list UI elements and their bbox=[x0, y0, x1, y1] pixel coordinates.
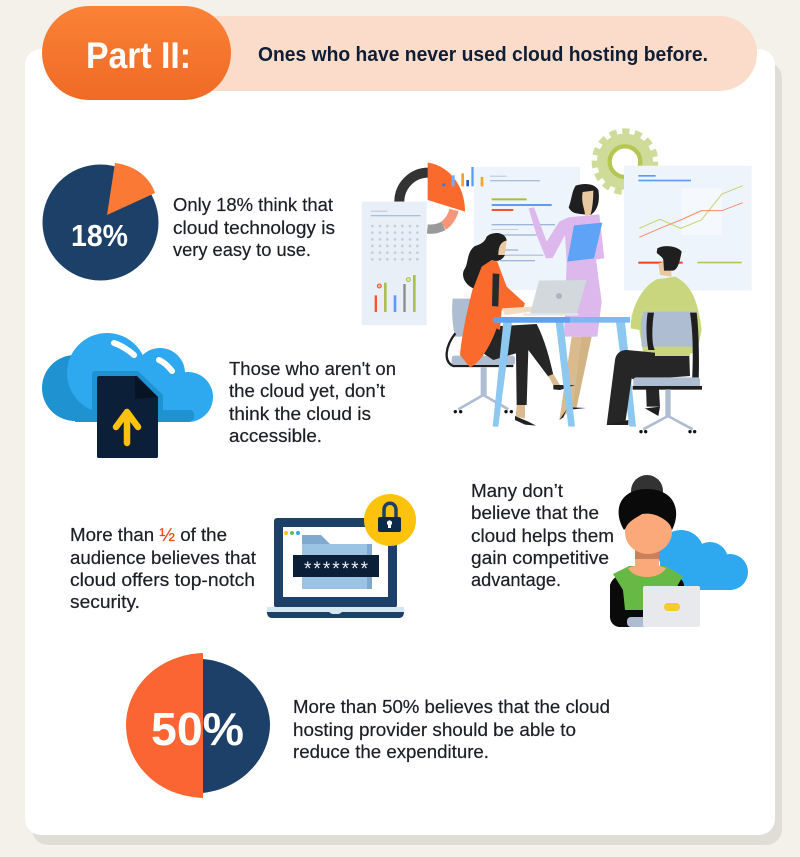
text: expenditure: More than 50% believes that the cloud bbox=[293, 697, 610, 717]
50% pie chart bbox=[126, 653, 270, 798]
seated man bbox=[607, 246, 702, 425]
right dashboard panel with line chart bbox=[624, 166, 752, 291]
mini bar chart bbox=[442, 167, 483, 186]
text: competitive advantage: advantage. bbox=[471, 570, 561, 590]
text: easy to use: Only 18% think that bbox=[173, 195, 333, 215]
icon: woman with laptop and cloud bbox=[610, 475, 748, 627]
laptop bbox=[523, 280, 587, 316]
text: security: security. bbox=[70, 592, 140, 612]
icon: cloud with file upload bbox=[42, 333, 213, 458]
left dashboard panel bbox=[362, 202, 427, 325]
text: competitive advantage: gain competitive bbox=[471, 548, 609, 568]
donut chart bbox=[399, 163, 465, 229]
part badge bbox=[42, 6, 231, 100]
text: easy to use: very easy to use. bbox=[173, 240, 311, 260]
text: security bbox=[70, 525, 256, 612]
text: accessible: the cloud yet, don’t bbox=[229, 381, 385, 401]
seated man's chair bbox=[633, 312, 702, 433]
standing woman bbox=[529, 184, 604, 420]
part badge: Part II: bbox=[86, 35, 191, 76]
text: easy to use: cloud technology is bbox=[173, 218, 335, 238]
text: competitive advantage: believe that the bbox=[471, 503, 599, 523]
icon: laptop with password and lock bbox=[267, 494, 416, 618]
text: expenditure: reduce the expenditure. bbox=[293, 742, 489, 762]
text: accessible: Those who aren't on bbox=[229, 359, 396, 379]
text: competitive advantage: Many don’t bbox=[471, 481, 563, 501]
text: security: audience believes that bbox=[70, 548, 256, 568]
middle dashboard panel bbox=[474, 167, 580, 290]
18% pie chart bbox=[42, 163, 158, 280]
text: expenditure: hosting provider should be able to bbox=[293, 720, 576, 740]
text: security: More than ½ of the bbox=[70, 525, 227, 545]
illustration: team meeting with dashboards bbox=[362, 132, 752, 433]
text: accessible: think the cloud is bbox=[229, 404, 371, 424]
seated woman's chair bbox=[447, 299, 515, 413]
text: easy to use bbox=[173, 195, 335, 260]
18% pie chart: 18% bbox=[71, 218, 128, 253]
50% pie chart: 50% bbox=[151, 703, 244, 755]
text: expenditure bbox=[293, 697, 610, 762]
text: security: cloud offers top-notch bbox=[70, 570, 255, 590]
table bbox=[493, 317, 636, 427]
header bar bbox=[170, 16, 757, 91]
gear bbox=[596, 132, 654, 191]
text: competitive advantage: cloud helps them bbox=[471, 526, 614, 546]
text: accessible: accessible. bbox=[229, 426, 322, 446]
text: accessible bbox=[229, 359, 396, 446]
header subtitle: Ones who have never used cloud hosting before. bbox=[258, 44, 708, 66]
icon: laptop with password and lock: ******* bbox=[304, 559, 369, 580]
seated woman bbox=[460, 233, 575, 426]
text: competitive advantage bbox=[471, 481, 614, 590]
